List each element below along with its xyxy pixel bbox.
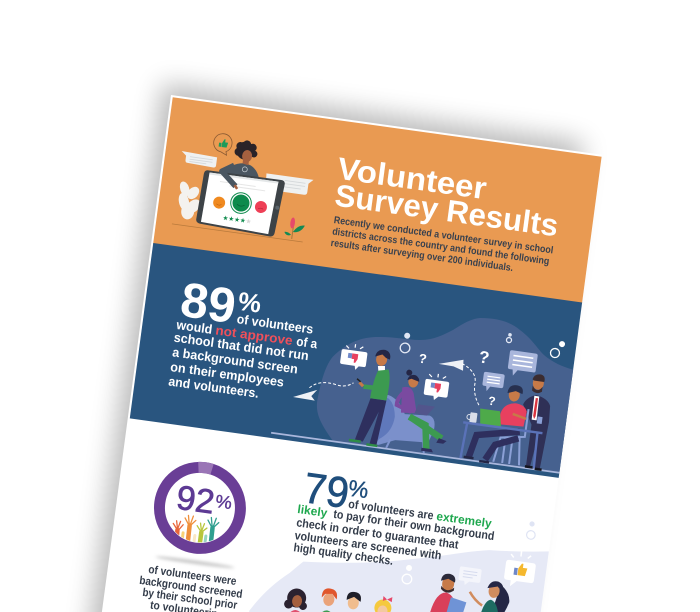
- donut chart 92%: [154, 462, 245, 554]
- child with black hair: [346, 592, 361, 610]
- adults group: [430, 574, 510, 612]
- question marks: ?: [478, 347, 491, 368]
- kids group: [284, 588, 392, 612]
- thumbs-down bubble right: [423, 372, 450, 402]
- stat 79% description: high quality checks.: [293, 540, 394, 568]
- intro paragraph: Recently we conducted a volunteer survey in school: [333, 215, 554, 256]
- intro paragraph: results after surveying over 200 individuals.: [330, 238, 514, 274]
- stat description: and volunteers.: [168, 373, 260, 401]
- stat 89%: 89: [177, 273, 239, 334]
- stat 79% description: to pay for their own background: [333, 507, 495, 543]
- stat 79%: [307, 472, 368, 508]
- illustration backdrop blob: [317, 318, 574, 472]
- title: Survey Results: [333, 178, 560, 243]
- person arm pointing at tablet: [220, 164, 240, 189]
- icon: paper plane left: [293, 375, 353, 406]
- star rating: ★★★★★: [222, 214, 252, 226]
- woman with long hair: [468, 581, 510, 612]
- tablet: [195, 169, 285, 238]
- thumbs-up bubble: [504, 552, 536, 586]
- lavender backdrop blob: [249, 550, 549, 612]
- stat 89%: %: [236, 286, 263, 319]
- donut caption: background screened: [139, 575, 243, 601]
- donut value: %: [214, 491, 233, 513]
- stat description: school that did not run: [173, 330, 310, 363]
- question marks: [414, 339, 502, 408]
- stat 79% description: volunteers are screened with: [294, 528, 442, 562]
- left speech bubble: [180, 151, 217, 168]
- question marks: ?: [418, 351, 428, 367]
- panel: orange header: [153, 97, 602, 303]
- speech bubbles: [482, 347, 538, 397]
- stat description: [167, 303, 321, 408]
- stat 79% description: [294, 500, 494, 565]
- thumbs up bubble: [212, 133, 233, 156]
- stat 79% description: check in order to guarantee that: [296, 515, 459, 552]
- stat 79% description: likely: [297, 502, 329, 520]
- seated woman with laptop: [391, 369, 455, 454]
- icon: green face: [229, 191, 253, 215]
- man with phone in green sweater: [348, 347, 394, 448]
- icon: white leaf: [174, 179, 206, 221]
- child with dark curly hair: [284, 588, 307, 612]
- table: [458, 422, 542, 469]
- stat description: of a: [296, 334, 319, 351]
- infographic page, tilted: [78, 72, 602, 612]
- donut value: [178, 486, 232, 514]
- stat description: on their employees: [170, 359, 285, 390]
- stat 79% description: of volunteers are: [347, 497, 435, 523]
- small speech bubble: [458, 566, 482, 584]
- seated man at laptop with standing colleague: [458, 365, 555, 471]
- sofa: [374, 394, 438, 454]
- title: Volunteer: [335, 151, 489, 206]
- page sheet: [99, 95, 602, 612]
- right speech bubble: [264, 173, 314, 196]
- icon: green laptop: [478, 408, 503, 426]
- icon: mug: [466, 412, 478, 423]
- person behind tablet: [223, 138, 264, 179]
- seated man: [499, 401, 528, 428]
- stat description: a background screen: [172, 344, 299, 377]
- stat description: would: [175, 317, 213, 337]
- chair: [493, 405, 529, 466]
- blonde child with bow: [374, 596, 392, 612]
- donut caption: [140, 566, 242, 612]
- icon: raised coloured hands: [172, 514, 220, 542]
- stat 79%: %: [347, 475, 370, 503]
- stat 89%: [177, 273, 264, 338]
- illustration: person rating on tablet: [172, 128, 318, 242]
- intro paragraph: districts across the country and found the following: [332, 227, 550, 268]
- thumbs-down bubble left: [339, 342, 368, 371]
- blurred rating text: [220, 182, 266, 191]
- title: [332, 151, 564, 243]
- ground line: [172, 224, 303, 242]
- icon: orange face: [212, 196, 226, 209]
- stat description: not approve: [215, 322, 294, 348]
- standing man: [515, 373, 555, 471]
- stat 79%: 79: [301, 464, 352, 518]
- icon: plant: [284, 217, 306, 241]
- child with orange hair: [322, 588, 338, 612]
- intro paragraph: [330, 215, 554, 279]
- stat description: of volunteers: [236, 311, 314, 337]
- floor line: [271, 433, 559, 473]
- page shadow: [88, 84, 583, 612]
- icon: paper plane right: [434, 356, 486, 407]
- question marks: ?: [487, 394, 497, 408]
- stat 79% description: extremely: [436, 509, 493, 531]
- panel: blue section: [130, 243, 584, 478]
- man with clipboard: [430, 574, 466, 612]
- icon: red face: [254, 200, 268, 214]
- panel: white statistics section: [140, 462, 549, 612]
- donut value: 92: [174, 479, 217, 522]
- donut ground shadow: [155, 555, 235, 570]
- donut caption: of volunteers were: [148, 564, 237, 588]
- decorative circles: [402, 522, 536, 584]
- decorative circles: [400, 318, 566, 374]
